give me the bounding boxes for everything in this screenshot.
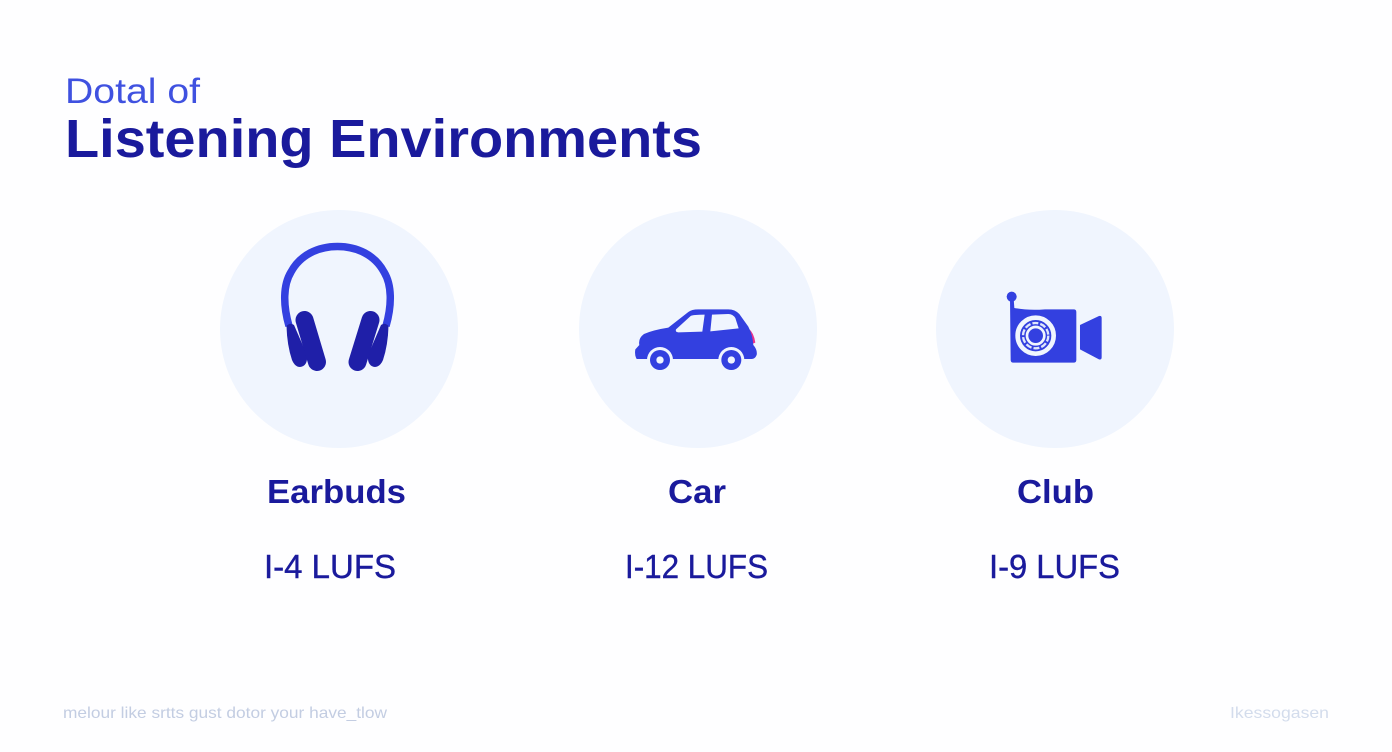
panel: car	[579, 210, 817, 585]
title: Listening Environments	[65, 109, 702, 169]
panel: earbuds	[220, 210, 458, 585]
label: club: Club	[1017, 473, 1094, 510]
footer brand: Ikessogasen	[1230, 705, 1329, 722]
value: car loudness: I-12 LUFS	[625, 548, 768, 585]
value: earbuds loudness: I-4 LUFS	[264, 548, 396, 585]
label: car: Car	[668, 473, 726, 510]
subtitle: Dotal of	[65, 72, 200, 111]
label: earbuds: Earbuds	[267, 473, 406, 510]
icon: car	[635, 309, 757, 373]
footer note: melour like srtts gust dotor your have_tlow	[63, 705, 387, 722]
icon: headphones	[285, 246, 390, 367]
circle: earbuds background	[220, 210, 458, 448]
icon: video camera	[1007, 292, 1102, 363]
circle: car background	[579, 210, 817, 448]
panel: club	[936, 210, 1174, 585]
circle: club background	[936, 210, 1174, 448]
value: club loudness: I-9 LUFS	[989, 548, 1120, 585]
